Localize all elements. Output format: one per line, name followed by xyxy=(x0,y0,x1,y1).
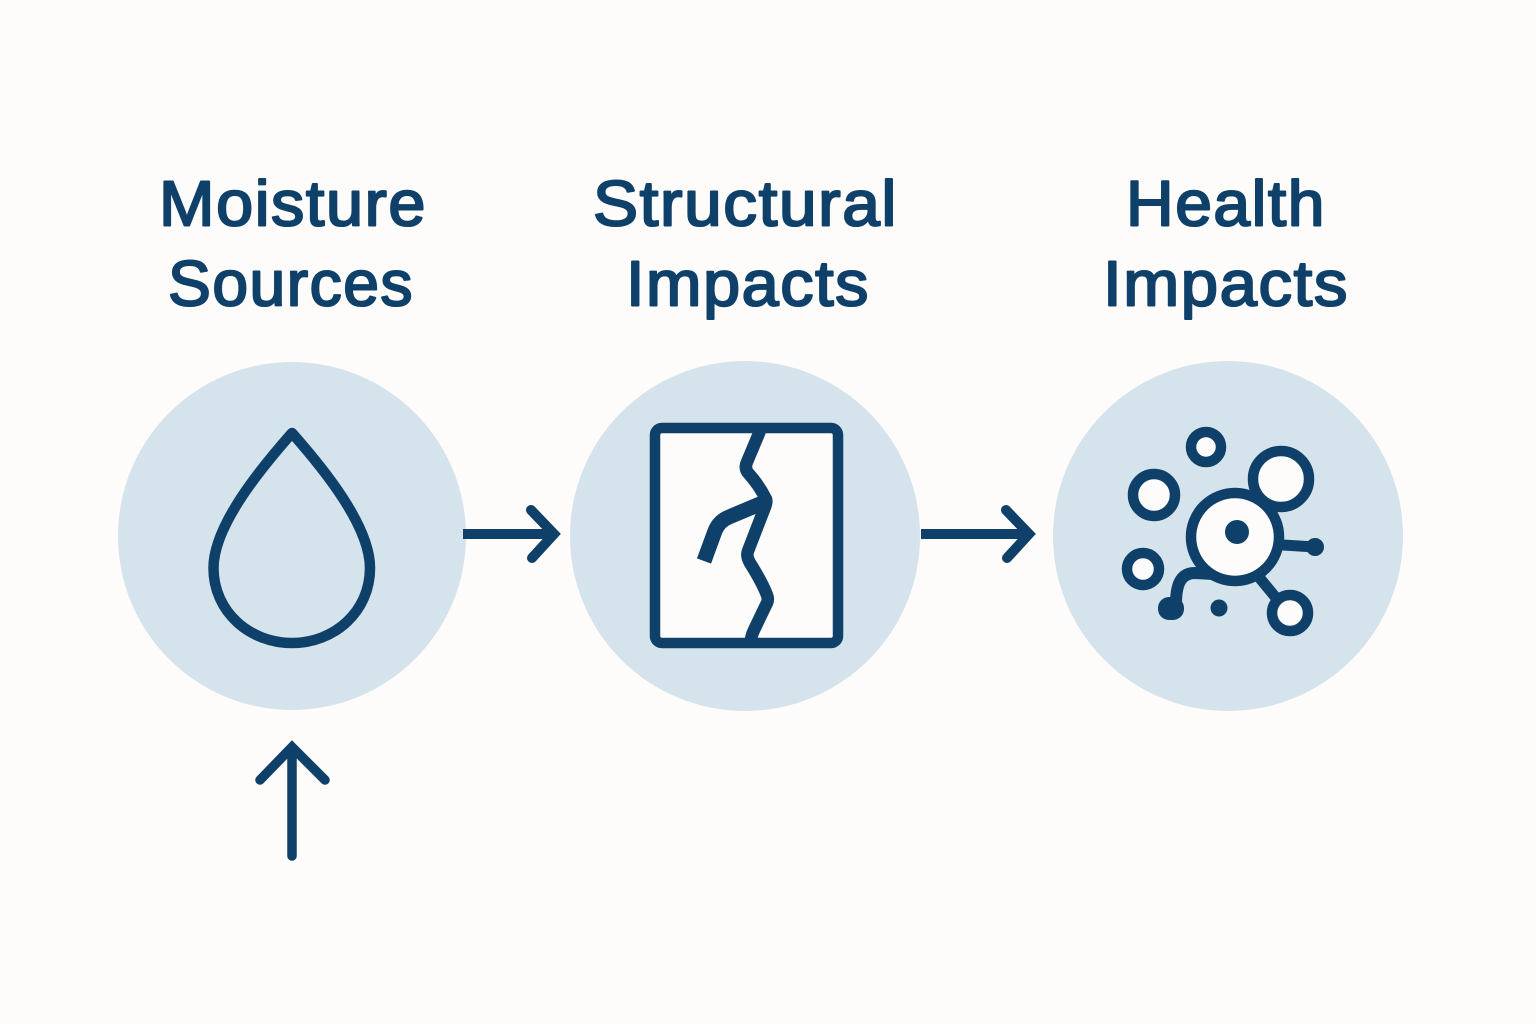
panel: moisture sources circle xyxy=(118,362,466,710)
panel: structural impacts circle xyxy=(570,361,920,711)
heading: Structural Impacts: Impacts xyxy=(626,248,870,320)
heading: Health Impacts: Health xyxy=(1126,168,1326,240)
heading: Moisture Sources xyxy=(159,168,427,320)
arrow: upward into moisture sources xyxy=(260,747,325,856)
heading: Structural Impacts: Structural xyxy=(593,168,898,240)
heading: Health Impacts xyxy=(1103,168,1349,320)
arrow: structural to health xyxy=(921,510,1029,558)
panel: health impacts circle xyxy=(1053,361,1403,711)
heading: Moisture Sources: Moisture xyxy=(159,168,427,240)
icon: mold spores xyxy=(1127,432,1324,631)
heading: Structural Impacts xyxy=(593,168,898,320)
icon: water drop xyxy=(214,433,370,643)
icon: cracked wall xyxy=(655,428,838,643)
heading: Health Impacts: Impacts xyxy=(1103,248,1349,320)
heading: Moisture Sources: Sources xyxy=(168,248,414,320)
arrow: moisture to structural xyxy=(463,510,554,558)
